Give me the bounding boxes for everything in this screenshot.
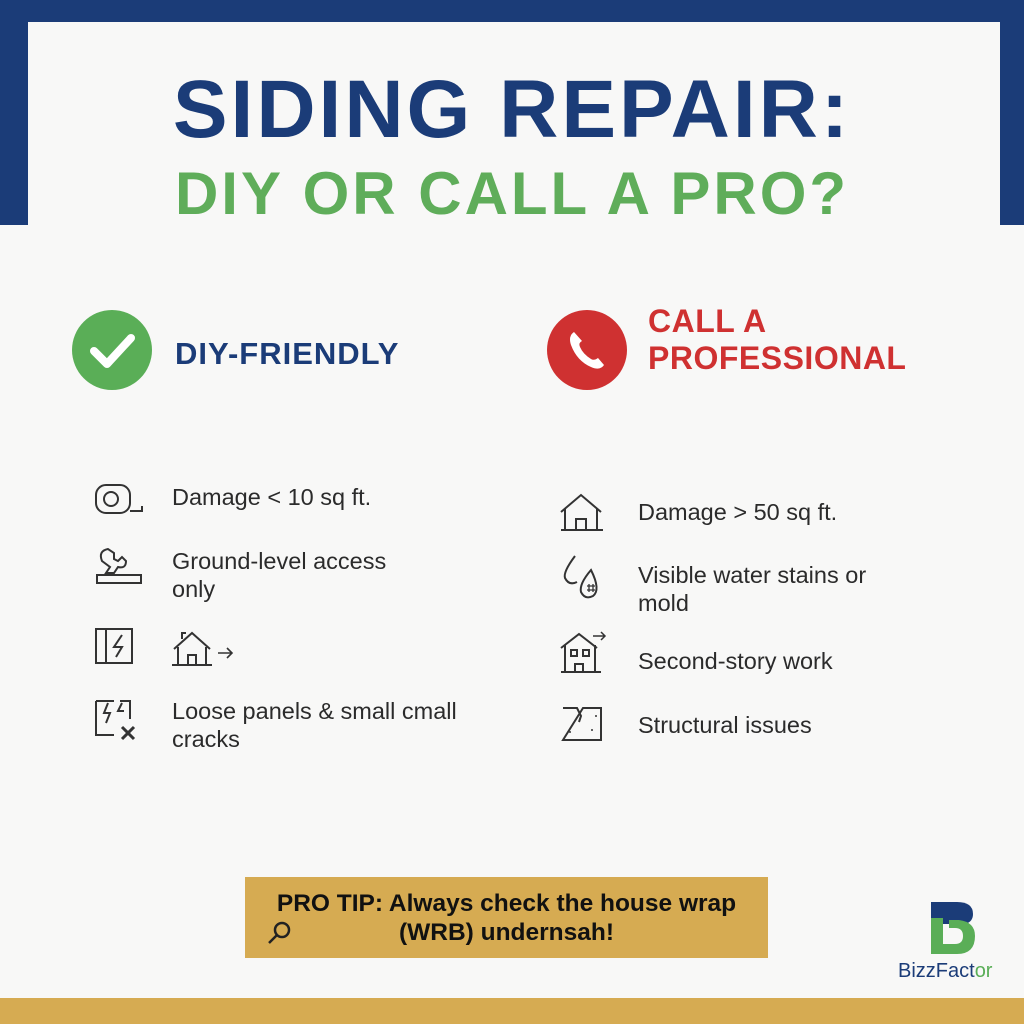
list: DIY: Loose panels & small cmall (172, 698, 457, 724)
list: Pro (560, 494, 866, 741)
icon: house arrow (172, 632, 233, 666)
navy frame (0, 0, 1024, 225)
icon: cracked panel (95, 700, 135, 740)
pro tip box: PRO TIP: Always check the house wrap (277, 890, 736, 917)
pro tip box: (WRB) undernsah! (399, 919, 614, 946)
list: Pro: Second-story work (638, 648, 833, 674)
icon: magnifier (268, 922, 290, 944)
Pro header (547, 303, 906, 390)
icon: phone circle (547, 310, 627, 390)
icon: two-story house (560, 632, 606, 673)
icon: house (560, 494, 603, 531)
icon: water drops (564, 555, 598, 598)
title: DIY OR CALL A PRO? (175, 160, 849, 227)
list: DIY (95, 484, 457, 752)
icon: wrench ruler (96, 548, 142, 584)
pro tip box (245, 877, 768, 958)
title: SIDING REPAIR: (173, 64, 851, 155)
list: Pro: Visible water stains or (638, 562, 866, 588)
title (173, 64, 851, 227)
list: Pro: Structural issues (638, 712, 812, 738)
icon: check circle (72, 310, 152, 390)
gold bottom bar (0, 998, 1024, 1024)
list: Pro: Damage > 50 sq ft. (638, 499, 837, 525)
list: DIY: only (172, 576, 215, 602)
Pro header: CALL A (648, 303, 767, 339)
list: DIY: cracks (172, 726, 240, 752)
list: Pro: mold (638, 590, 689, 616)
logo (898, 902, 992, 982)
Pro header: PROFESSIONAL (648, 340, 906, 376)
icon: tape measure (95, 484, 143, 514)
DIY header: DIY-FRIENDLY (175, 336, 399, 371)
list: DIY: Ground-level access (172, 548, 386, 574)
DIY header (72, 310, 399, 390)
list: DIY: Damage < 10 sq ft. (172, 484, 371, 510)
icon: structural crack (561, 707, 602, 741)
logo: BizzFactor (898, 960, 992, 982)
icon: panel bolt (95, 628, 133, 664)
